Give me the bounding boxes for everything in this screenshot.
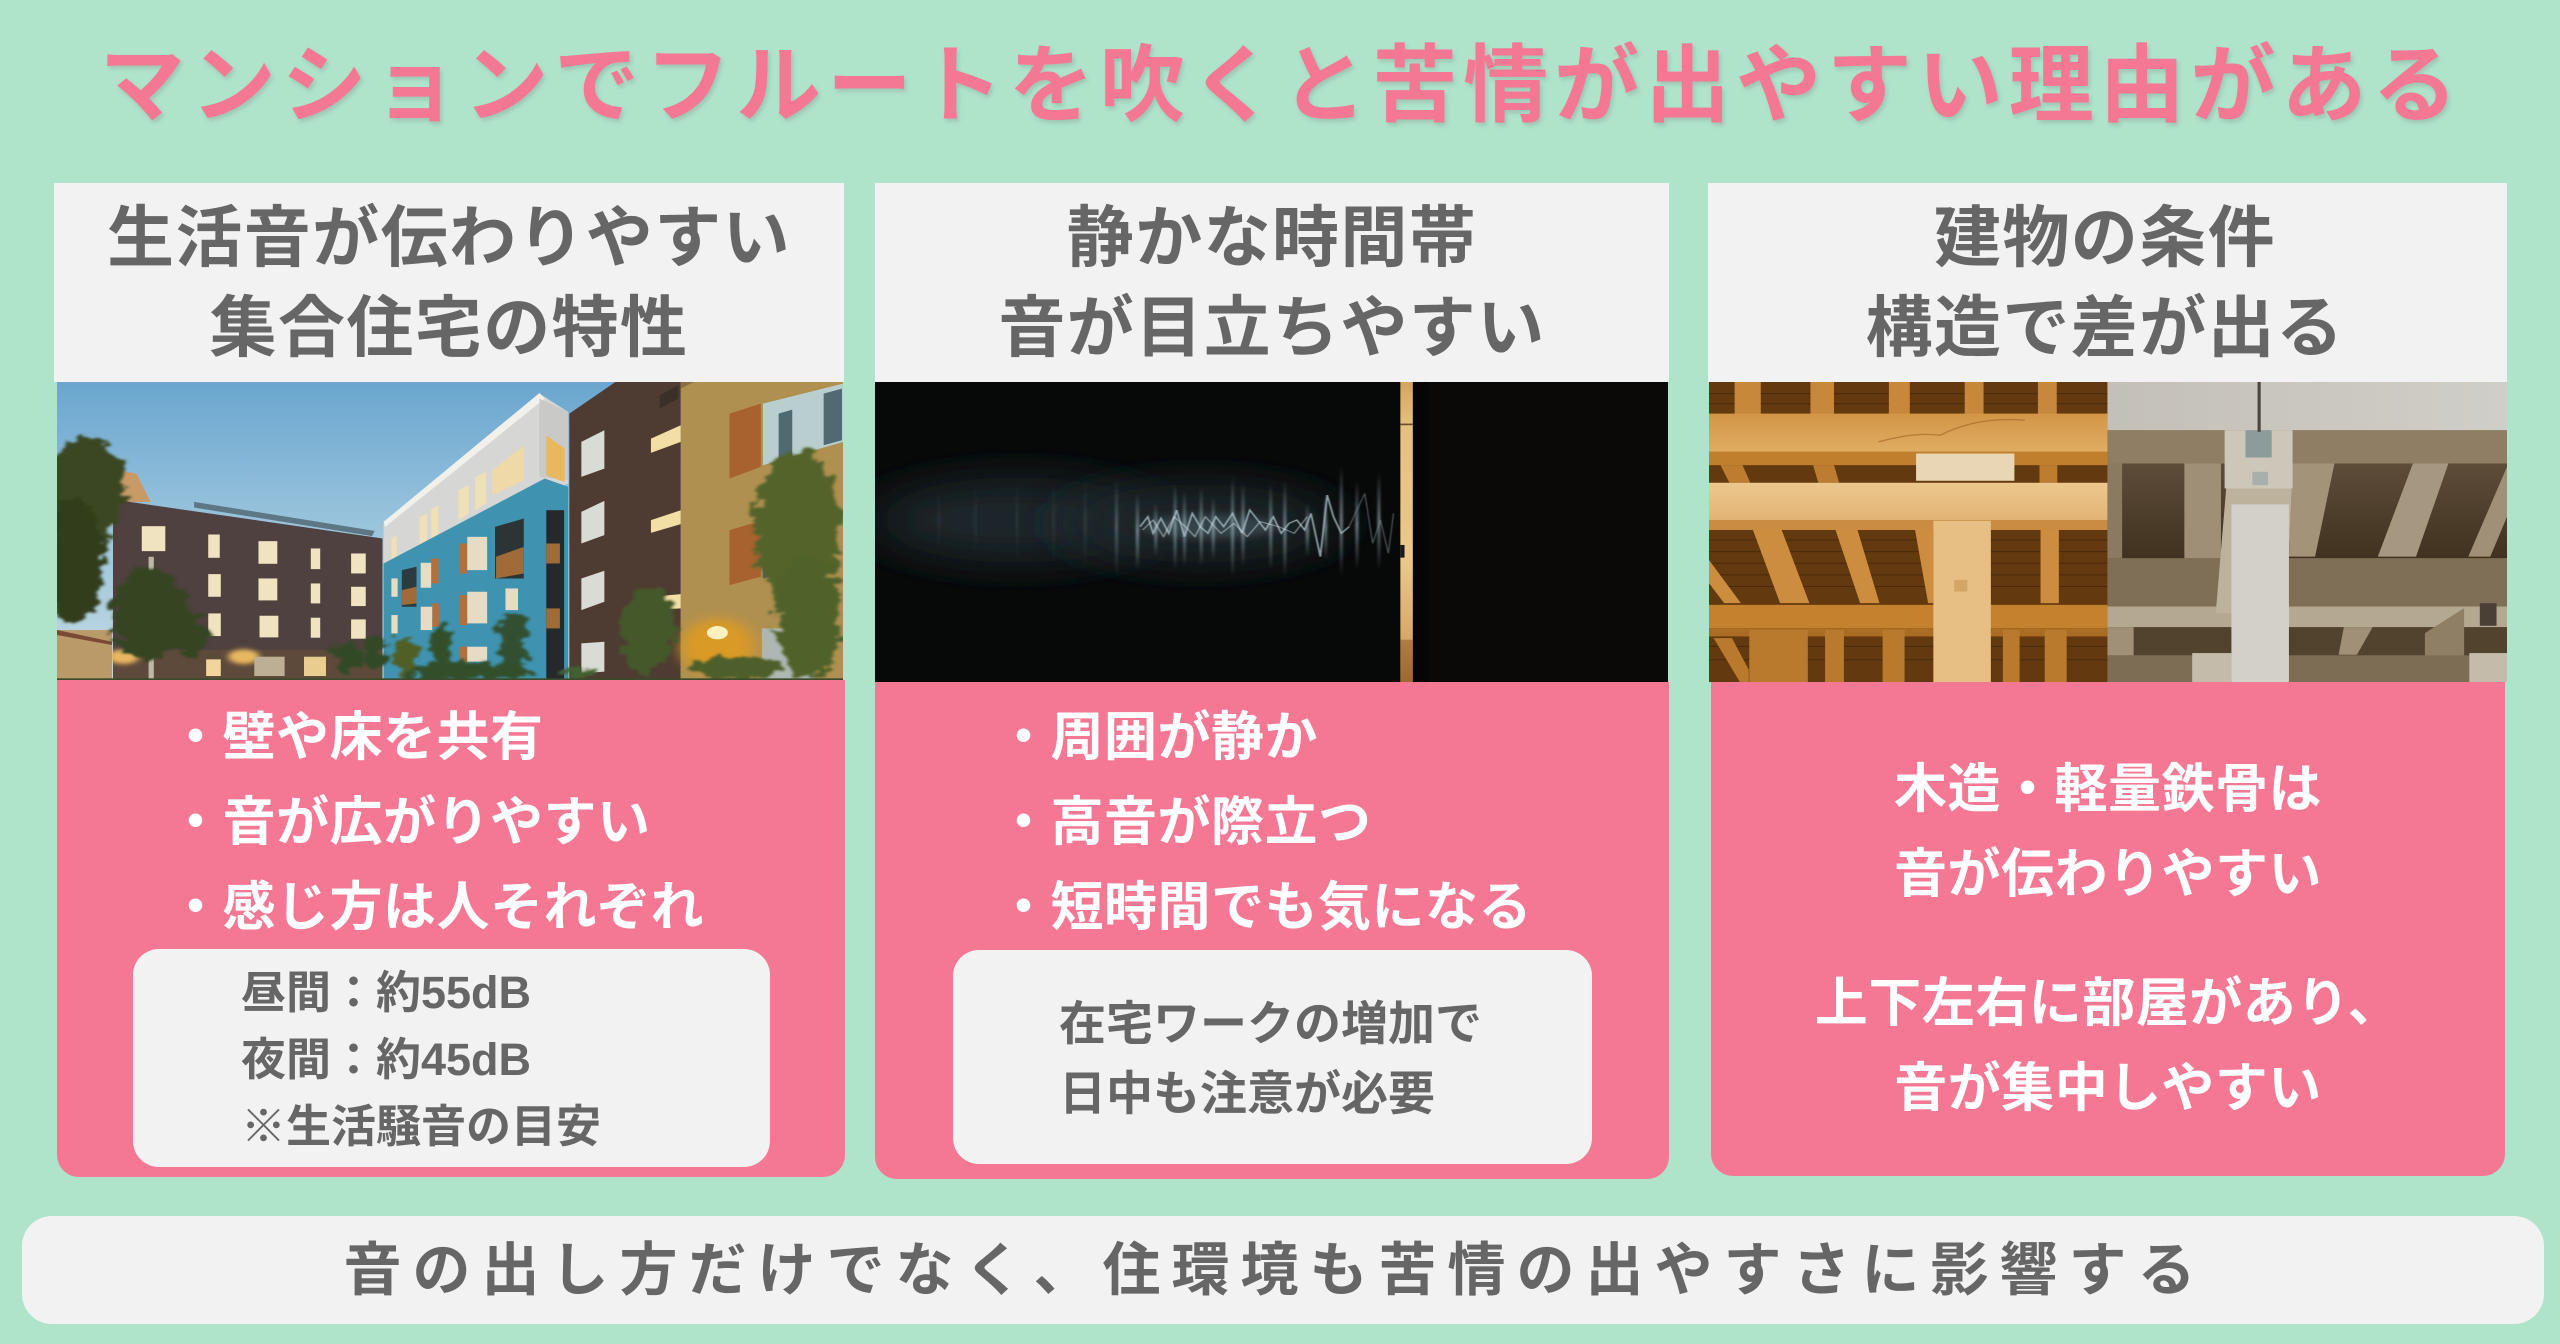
bottom summary banner: 音の出し方だけでなく、住環境も苦情の出やすさに影響する [343,1238,2206,1303]
photo: sound wave in a dark room [875,382,1668,682]
pink content area: panel 1 [57,680,845,1177]
panel: shared living sound [54,183,845,1177]
text block: rooms on all sides: 音が集中しやすい [1894,1059,2322,1118]
heading: panel 1: 生活音が伝わりやすい [107,201,791,276]
text block: rooms on all sides [1815,974,2401,1118]
callout text: remote work note [1059,997,1482,1120]
callout: noise guideline [133,949,770,1167]
pink content area: panel 2 [875,682,1669,1179]
heading: panel 3 [1708,183,2507,382]
heading: panel 3: 建物の条件 [1934,201,2276,276]
bullet list: panel 1: ・音が広がりやすい [169,793,650,852]
heading: panel 2 [875,183,1669,382]
title: マンションでフルートを吹くと苦情が出やすい理由がある [100,39,2463,134]
text block: wood and light steel [1894,760,2322,904]
text block: wood and light steel: 音が伝わりやすい [1894,845,2322,904]
heading: panel 1: 集合住宅の特性 [210,291,688,366]
panel: quiet hours [875,183,1669,1179]
heading: panel 2: 音が目立ちやすい [998,291,1546,366]
callout text: decibel figures: 夜間：約45dB [241,1034,531,1085]
text block: rooms on all sides: 上下左右に部屋があり、 [1815,974,2401,1033]
bullet list: panel 2: ・短時間でも気になる [997,878,1532,937]
text block: wood and light steel: 木造・軽量鉄骨は [1894,760,2322,819]
photo: apartment buildings at dusk [57,382,843,680]
bottom summary banner [22,1216,2544,1324]
photo: wood and concrete structure comparison [1709,382,2507,682]
pink content area: panel 3 [1711,682,2505,1176]
callout text: decibel figures [241,967,601,1152]
panel: building conditions [1708,183,2507,1176]
bullet list: panel 2: ・周囲が静か [997,708,1318,767]
callout text: remote work note: 在宅ワークの増加で [1059,997,1482,1050]
heading: panel 2: 静かな時間帯 [1067,201,1477,276]
callout text: remote work note: 日中も注意が必要 [1059,1067,1435,1120]
heading: panel 1 [54,183,844,382]
heading: panel 3: 構造で差が出る [1866,291,2344,366]
callout text: decibel figures: ※生活騒音の目安 [241,1101,601,1152]
bullet list: panel 1 [169,708,704,937]
bullet list: panel 2 [997,708,1532,937]
bullet list: panel 1: ・壁や床を共有 [169,708,544,767]
callout: remote work [953,950,1592,1164]
bullet list: panel 2: ・高音が際立つ [997,793,1372,852]
bullet list: panel 1: ・感じ方は人それぞれ [169,878,704,937]
callout text: decibel figures: 昼間：約55dB [241,967,531,1018]
